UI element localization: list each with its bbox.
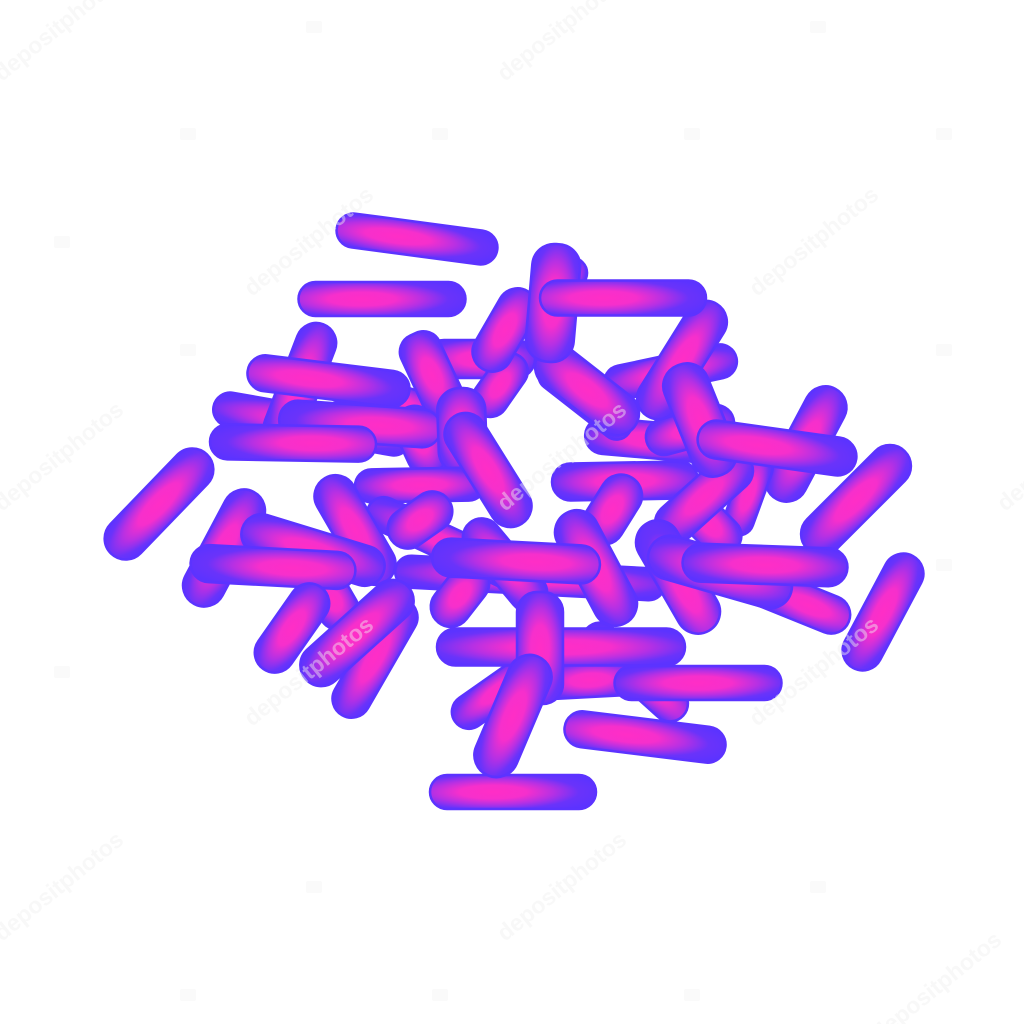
rod: bottom right slanted [562,709,728,765]
rod: right behind slanted [720,449,777,540]
rod: far left isolated [96,440,222,568]
rod: top arch diagonal [526,336,648,444]
rod: back centre long [394,555,666,601]
rod: under arch [465,346,535,424]
rod: centre diagonal front [437,405,539,535]
bacteria rods [96,211,930,809]
rod: left cluster short [301,564,365,636]
rod: slanted upper [394,325,470,425]
rod: top isolated [334,211,500,267]
rod: bottom vertical [517,592,563,704]
rod: right isolated upper [792,436,920,564]
watermark text: depositphotos [492,826,631,946]
rod: right cluster diagonal [647,443,761,551]
rod: second isolated [298,282,466,316]
rod: top horizontal back [425,340,535,378]
watermark text: depositphotos [744,611,883,731]
rod: left cluster diagonal [307,468,403,592]
rod: lower right diagonal [628,512,728,642]
rod: centre short [380,484,460,556]
rod: front left lower [210,424,376,462]
rod: lower right back [735,561,856,639]
rod: top right back slanted [642,401,738,459]
rod: lower centre second [455,511,555,619]
rod: bottom horizontal [437,628,685,666]
rod: lower right slanted [643,530,797,614]
rod: top small [537,252,593,308]
rod: bottom back diagonal [575,615,695,729]
rod: left cluster front [190,544,356,590]
rod: lower right front [682,543,848,587]
rod: low left behind [326,591,424,725]
rod: bottom right horizontal [614,666,782,700]
watermark text: depositphotos [744,181,883,301]
rod: bottom front diagonal [468,648,558,784]
rod: top front horizontal [540,280,706,316]
rod: centre right short [575,467,650,553]
rod: lower centre short [423,555,497,635]
rod: centre horizontal [355,467,485,503]
rod: top right back horizontal [601,341,740,403]
rod: low left [247,576,337,680]
rod: front left mid [278,399,442,449]
rod: top arch lower [532,354,638,446]
rod: right isolated lower [836,547,930,677]
rod: centre front horizontal [431,538,601,584]
rod: bottom isolated [430,775,596,809]
rod: centre right diagonal [547,502,645,634]
rod: centre vertical back [437,387,487,474]
rod: upper right slanted [629,293,735,427]
rod: top right back [584,416,716,464]
rod: lower centre back [361,492,539,598]
rod: top vertical [524,242,582,364]
rod: right triangle filler [671,486,749,564]
rod: back middle [321,364,460,436]
watermark text: depositphotos [492,396,631,516]
rod: low left front [292,571,422,695]
rod: bottom back slanted [445,645,555,735]
rod: back left vertical [258,317,342,453]
rod: front left upper [245,353,412,409]
rod: bottom back horizontal [539,660,641,700]
watermark text: depositphotos [239,181,378,301]
rod: left cluster slanted [236,509,390,591]
rod: right vertical far [758,379,854,509]
rod: right cluster vertical [657,357,743,483]
rod: centre stub [387,400,453,480]
rod: centre right horizontal [552,461,698,501]
rod: right cluster horizontal [695,418,859,478]
rod: top left slanted [465,281,545,379]
rod: left cluster vertical [176,482,272,614]
watermark text: depositphotos [239,611,378,731]
rod: back left low [211,390,413,458]
